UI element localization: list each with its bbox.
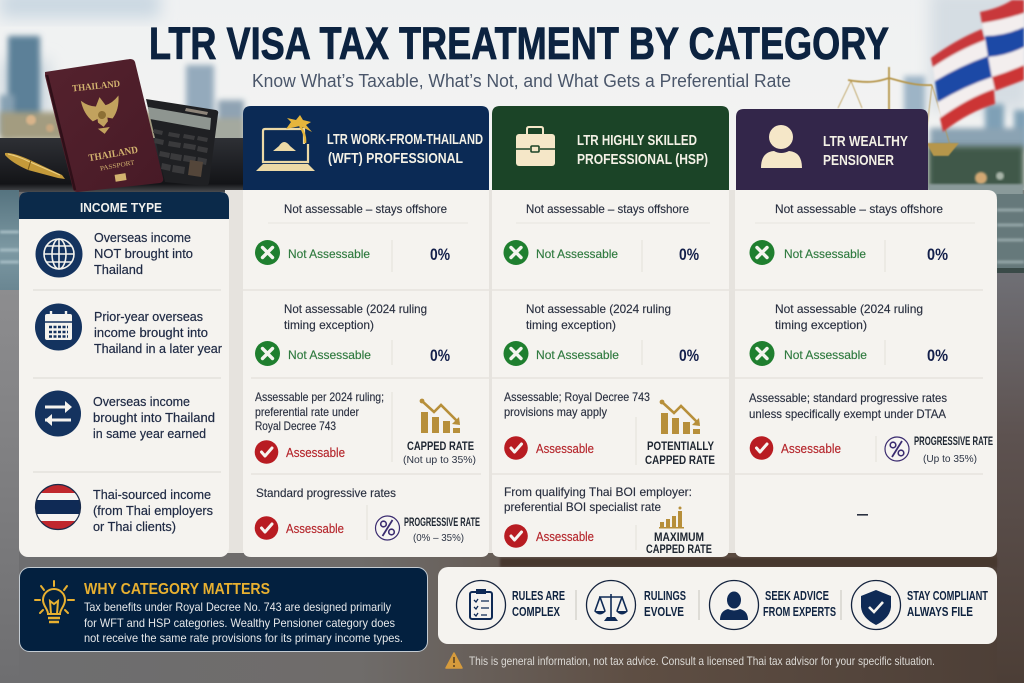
row: Thai-sourced income: or Thai clients) [93,520,176,534]
column header: WFT: LTR WORK-FROM-THAILAND [327,131,483,148]
row 2: not assessable timing exception: Not Assessable [288,348,371,362]
row 1: not assessable offshore: Not assessable – stays offshore [775,202,943,216]
heading: income type [19,192,229,219]
row 4: assessable BOI maximum capped: From qualifying Thai BOI employer: [504,485,692,499]
row: overseas income brought in same year: in same year earned [93,427,206,441]
icon: briefcase [516,127,555,166]
row 3: assessable capped rate: Royal Decree 743 [255,419,336,433]
row: prior-year overseas income: Thailand in a later year [94,342,222,356]
column header: Wealthy Pensioner [736,109,928,190]
callout: why category matters: WHY CATEGORY MATTERS [84,581,270,598]
panel: HSP column [492,190,729,557]
icon: Thailand passport [45,59,163,192]
reminder: seek advice [710,580,836,630]
heading: income type: INCOME TYPE [80,200,162,215]
row 1: not assessable offshore [750,202,948,265]
row 3: assessable progressive up to 35%: Assessable; standard progressive rates [749,391,947,405]
row 4: assessable progressive rate: Standard progressive rates [256,486,396,500]
row: Thai-sourced income: (from Thai employers [93,504,213,518]
row 2: not assessable timing exception: 0% [927,346,948,365]
row 3: assessable progressive up to 35% [749,391,993,465]
reminder: rulings evolve: RULINGS [644,589,686,603]
icon: laptop and palm [256,115,315,171]
row 2: not assessable timing exception [750,302,948,366]
column header: HSP: PROFESSIONAL (HSP) [577,151,708,168]
row: overseas income not brought in: Thailand [94,263,143,277]
row: overseas income brought in same year [35,390,215,441]
column header: Wealthy Pensioner: LTR WEALTHY [823,133,908,150]
row: overseas income brought in same year: Overseas income [93,395,190,409]
row: Thai-sourced income [35,484,213,534]
row 1: not assessable offshore: 0% [679,245,699,264]
callout: why category matters: Tax benefits under Royal Decree No. 743 are designed primarily [84,600,391,614]
row 4: no value dash [857,514,868,516]
row 1: not assessable offshore: Not Assessable [288,247,370,261]
row 3: assessable potentially capped: Assessable; Royal Decree 743 [504,390,650,404]
icon: Thailand passport: PASSPORT [99,159,135,172]
icon: rising bars [659,506,684,528]
row: prior-year overseas income: Prior-year overseas [94,310,203,324]
row 2: not assessable timing exception: timing exception) [526,318,616,332]
row 3: assessable progressive up to 35%: Assessable [781,442,841,456]
reminder: rules are complex: RULES ARE [512,589,565,603]
row 3: assessable potentially capped: CAPPED RATE [645,455,715,467]
row 4: assessable progressive rate: PROGRESSIVE RATE [404,517,480,529]
subtitle: Know What’s Taxable, What’s Not, and What Gets a Preferential Rate [252,71,791,91]
row: prior-year overseas income: income brought into [94,326,208,340]
row: overseas income not brought in: NOT brought into [94,247,193,261]
column header: WFT: (WFT) PROFESSIONAL [328,150,463,167]
row 3: assessable capped rate: (Not up to 35%) [403,454,476,466]
row 4: assessable progressive rate: (0% – 35%) [413,532,464,544]
callout: why category matters [20,568,428,652]
row 2: not assessable timing exception: Not Assessable [536,348,619,362]
row 4: assessable progressive rate: Assessable [286,522,344,536]
row 1: not assessable offshore [504,202,699,265]
row 2: not assessable timing exception: timing exception) [775,318,867,332]
row 3: assessable capped rate [255,390,476,466]
callout: why category matters: for WFT and HSP categories. Wealthy Pensioner category does [84,616,395,630]
panel: key reminders [438,567,997,644]
row 3: assessable potentially capped: POTENTIALLY [647,441,714,453]
row 1: not assessable offshore: 0% [927,245,948,264]
icon: calculator [146,99,218,186]
row 3: assessable capped rate: preferential rate under [255,405,359,419]
row 3: assessable potentially capped: Assessable [536,442,594,456]
row 3: assessable progressive up to 35%: (Up to 35%) [923,453,977,465]
row 2: not assessable timing exception: 0% [679,346,699,365]
row 4: assessable progressive rate [255,486,480,544]
icon: pen [5,153,65,179]
row 1: not assessable offshore: 0% [430,245,450,264]
reminder: stay compliant [852,580,988,630]
icon: garuda emblem [81,95,123,136]
reminder: stay compliant: STAY COMPLIANT [907,589,988,603]
row 3: assessable potentially capped: provisions may apply [504,405,607,419]
disclaimer: This is general information, not tax advice. Consult a licensed Thai tax advisor for your specific situation. [469,654,935,668]
panel: Wealthy Pensioner column [735,190,997,557]
reminder: seek advice: FROM EXPERTS [763,605,836,619]
row 1: not assessable offshore: Not assessable – stays offshore [526,202,689,216]
icon: person [761,125,802,168]
callout: why category matters: not receive the same rate provisions for its primary income types. [84,631,403,645]
row 4: assessable BOI maximum capped: Assessable [536,530,594,544]
reminder: rulings evolve [586,580,686,630]
backing: light gaps between table panels [225,190,740,553]
row 2: not assessable timing exception: Not assessable (2024 ruling [775,302,923,316]
row 4: assessable BOI maximum capped: MAXIMUM [654,532,704,544]
row 1: not assessable offshore: Not assessable – stays offshore [284,202,447,216]
row 4: assessable BOI maximum capped [504,485,712,556]
icon: light bulb [35,581,74,622]
row: overseas income not brought in [36,230,193,278]
row 3: assessable capped rate: Assessable [286,446,345,460]
reminder: stay compliant: ALWAYS FILE [907,605,973,619]
reminder: seek advice: SEEK ADVICE [765,589,829,603]
row 2: not assessable timing exception [255,302,450,366]
column header: Wealthy Pensioner: PENSIONER [823,152,894,169]
icon: Thai flag [931,0,1024,132]
reminder: rules are complex [456,580,565,630]
icon: balance scales behind header [838,67,957,155]
column header: HSP [492,106,729,190]
icon: Thailand passport: THAILAND [72,79,121,94]
row: overseas income brought in same year: brought into Thailand [93,411,215,425]
row 2: not assessable timing exception [504,302,699,366]
row 4: assessable BOI maximum capped: CAPPED RATE [646,544,712,556]
row 1: not assessable offshore: Not Assessable [784,247,866,261]
row: overseas income not brought in: Overseas income [94,231,191,245]
panel: WFT column [243,190,489,557]
column header: WFT [243,106,489,190]
icon: Thailand passport: THAILAND [88,145,139,164]
row: prior-year overseas income [35,304,222,356]
row 3: assessable capped rate: CAPPED RATE [407,441,474,453]
row: Thai-sourced income: Thai-sourced income [93,488,211,502]
row 2: not assessable timing exception: Not assessable (2024 ruling [284,302,427,316]
row 1: not assessable offshore [255,202,450,265]
reminder: rules are complex: COMPLEX [512,605,561,619]
panel: income type [19,192,229,557]
row 2: not assessable timing exception: 0% [430,346,450,365]
reminder: rulings evolve: EVOLVE [644,605,684,619]
row 3: assessable potentially capped [504,390,715,467]
row 2: not assessable timing exception: timing exception) [284,318,374,332]
row 1: not assessable offshore: Not Assessable [536,247,618,261]
icon: warning triangle [446,653,462,668]
column header: HSP: LTR HIGHLY SKILLED [577,132,697,149]
row 3: assessable progressive up to 35%: unless specifically exempt under DTAA [749,407,946,421]
row 4: assessable BOI maximum capped: preferential BOI specialist rate [504,500,661,514]
row 2: not assessable timing exception: Not assessable (2024 ruling [526,302,671,316]
row 2: not assessable timing exception: Not Assessable [784,348,867,362]
row 3: assessable capped rate: Assessable per 2024 ruling; [255,390,384,404]
